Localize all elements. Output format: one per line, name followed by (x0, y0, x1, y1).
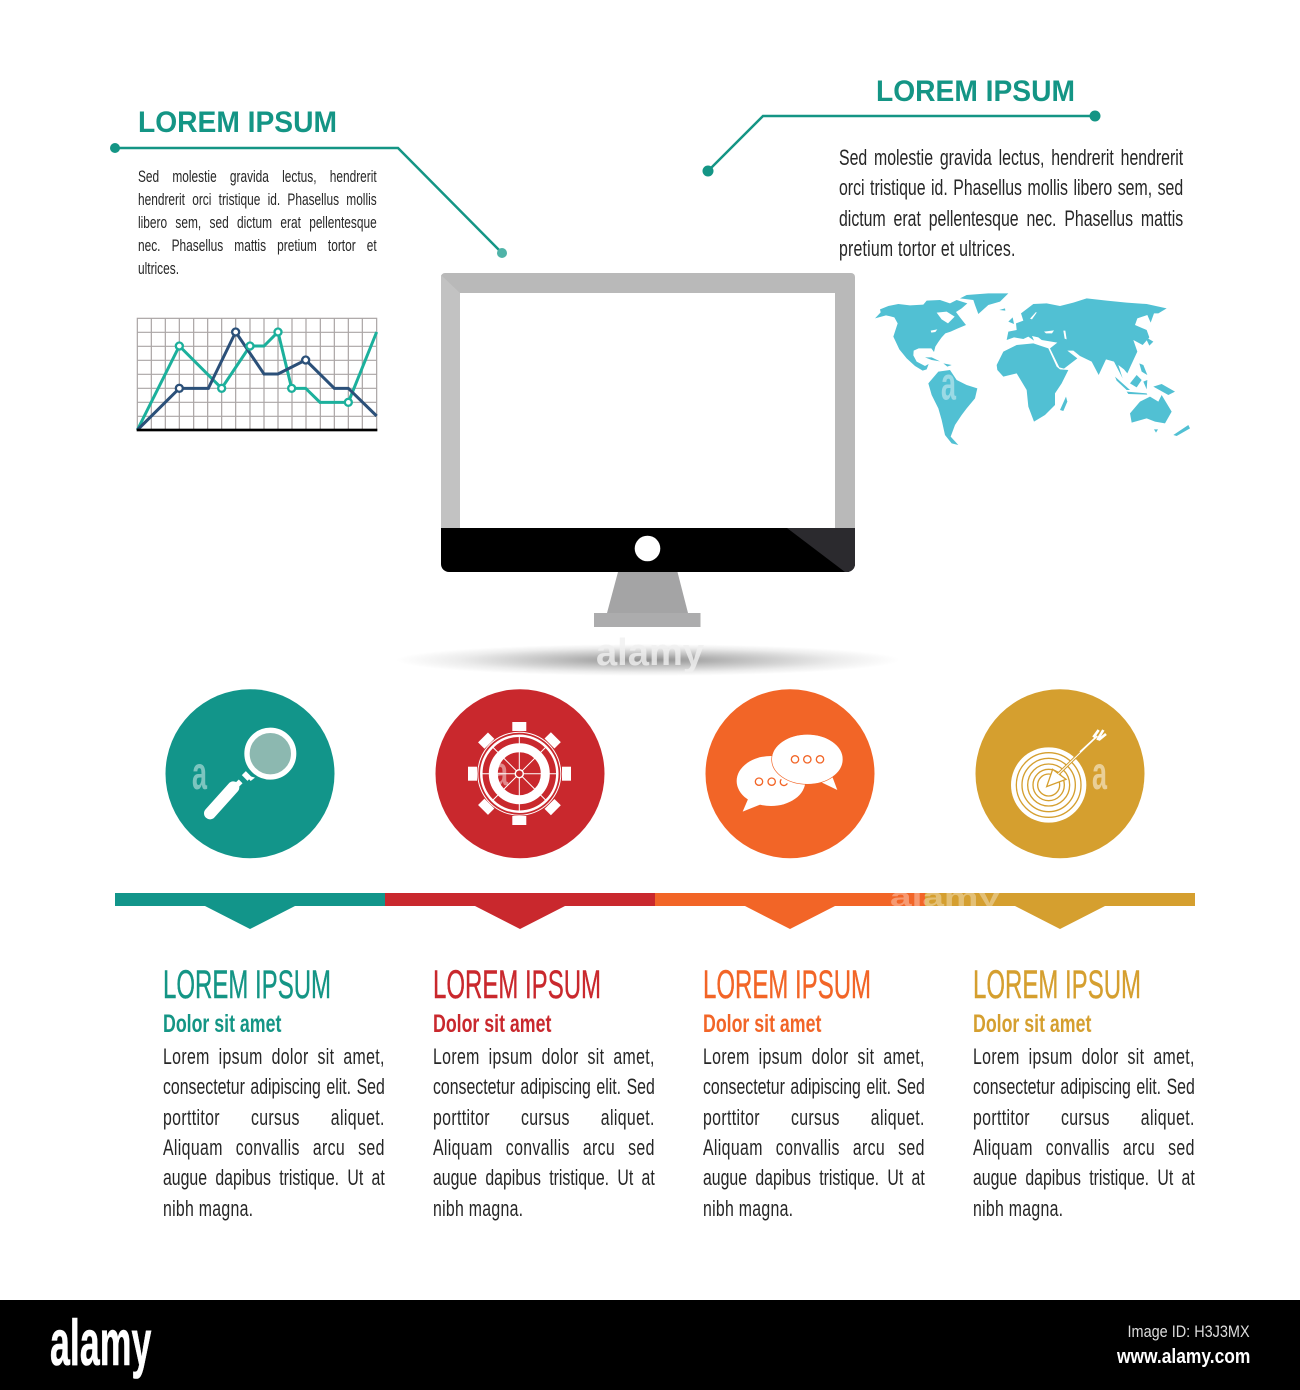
footer logo: alamy (50, 1306, 151, 1379)
world map: a (941, 357, 956, 409)
icon: gold target: a (1092, 747, 1107, 799)
timeline segment: gold (925, 893, 1195, 929)
icon: red gear: a (493, 750, 509, 794)
connector: left callout line (110, 143, 507, 258)
image id: Image ID: H3J3MX (1128, 1322, 1250, 1341)
heading: LOREM IPSUM (973, 963, 1141, 1007)
body text: augue dapibus tristique. Ut at (703, 1165, 925, 1190)
timeline bar (115, 882, 1195, 929)
panel: column 1 (163, 963, 385, 1221)
body text: augue dapibus tristique. Ut at (433, 1165, 655, 1190)
monitor (441, 273, 855, 627)
connector: right callout line (702, 110, 1100, 176)
body text: Lorem ipsum dolor sit amet, (973, 1044, 1195, 1069)
timeline segment: teal (115, 893, 385, 929)
monitor base (594, 613, 700, 627)
left callout heading: LOREM IPSUM (138, 106, 337, 139)
subheading: Dolor sit amet (703, 1010, 821, 1038)
footer bar (0, 1300, 1300, 1390)
body text: porttitor cursus aliquet. (163, 1105, 385, 1130)
body text (433, 1044, 655, 1221)
body text: augue dapibus tristique. Ut at (163, 1165, 385, 1190)
left callout text (138, 167, 377, 278)
right callout text: Sed molestie gravida lectus, hendrerit hendrerit (839, 145, 1183, 170)
body text: nibh magna. (163, 1196, 253, 1221)
body text: porttitor cursus aliquet. (433, 1105, 655, 1130)
monitor stand (607, 572, 688, 613)
body text: porttitor cursus aliquet. (973, 1105, 1195, 1130)
monitor power button (635, 536, 660, 561)
panel: column 4 (973, 963, 1195, 1221)
body text: Aliquam convallis arcu sed (973, 1135, 1195, 1160)
body text: nibh magna. (703, 1196, 793, 1221)
heading: LOREM IPSUM (163, 963, 331, 1007)
body text (703, 1044, 925, 1221)
body text: consectetur adipiscing elit. Sed (973, 1074, 1195, 1099)
body text: Lorem ipsum dolor sit amet, (163, 1044, 385, 1069)
left callout text: hendrerit orci tristique id. Phasellus mollis (138, 190, 377, 209)
right callout text (839, 145, 1184, 261)
heading: LOREM IPSUM (433, 963, 601, 1007)
right callout heading: LOREM IPSUM (876, 75, 1075, 108)
website: www.alamy.com (1117, 1346, 1250, 1368)
line chart (137, 318, 377, 431)
icon: orange speech bubbles (706, 689, 874, 858)
body text: nibh magna. (433, 1196, 523, 1221)
body text: Lorem ipsum dolor sit amet, (433, 1044, 655, 1069)
monitor shadow: alamy (596, 632, 704, 674)
body text: porttitor cursus aliquet. (703, 1105, 925, 1130)
icon: teal magnifying glass: a (192, 747, 207, 799)
world map (875, 293, 1190, 445)
panel: column 2 (433, 963, 655, 1221)
body text: consectetur adipiscing elit. Sed (163, 1074, 385, 1099)
monitor shadow (396, 632, 900, 676)
body text (163, 1044, 385, 1221)
right callout text: pretium tortor et ultrices. (839, 236, 1016, 261)
body text: consectetur adipiscing elit. Sed (433, 1074, 655, 1099)
right callout text: orci tristique id. Phasellus mollis libero sem, sed (839, 175, 1183, 200)
subheading: Dolor sit amet (973, 1010, 1091, 1038)
subheading: Dolor sit amet (163, 1010, 281, 1038)
body text: Lorem ipsum dolor sit amet, (703, 1044, 925, 1069)
body text: augue dapibus tristique. Ut at (973, 1165, 1195, 1190)
right callout text: dictum erat pellentesque nec. Phasellus mattis (839, 206, 1183, 231)
body text: Aliquam convallis arcu sed (163, 1135, 385, 1160)
body text: nibh magna. (973, 1196, 1063, 1221)
timeline segment: orange (655, 893, 925, 929)
icon: gold target (976, 689, 1144, 858)
timeline segment: red (385, 893, 655, 929)
panel: column 3 (703, 963, 925, 1221)
body text: Aliquam convallis arcu sed (703, 1135, 925, 1160)
left callout text: nec. Phasellus mattis pretium tortor et (138, 236, 377, 255)
subheading: Dolor sit amet (433, 1010, 551, 1038)
body text: Aliquam convallis arcu sed (433, 1135, 655, 1160)
body text: consectetur adipiscing elit. Sed (703, 1074, 925, 1099)
timeline bar: alamy (890, 882, 1001, 912)
left callout text: Sed molestie gravida lectus, hendrerit (138, 167, 377, 186)
icon: red gear (436, 689, 604, 858)
left callout text: ultrices. (138, 259, 179, 278)
left callout text: libero sem, sed dictum erat pellentesque (138, 213, 377, 232)
body text (973, 1044, 1195, 1221)
icon: teal magnifying glass (166, 689, 334, 858)
heading: LOREM IPSUM (703, 963, 871, 1007)
